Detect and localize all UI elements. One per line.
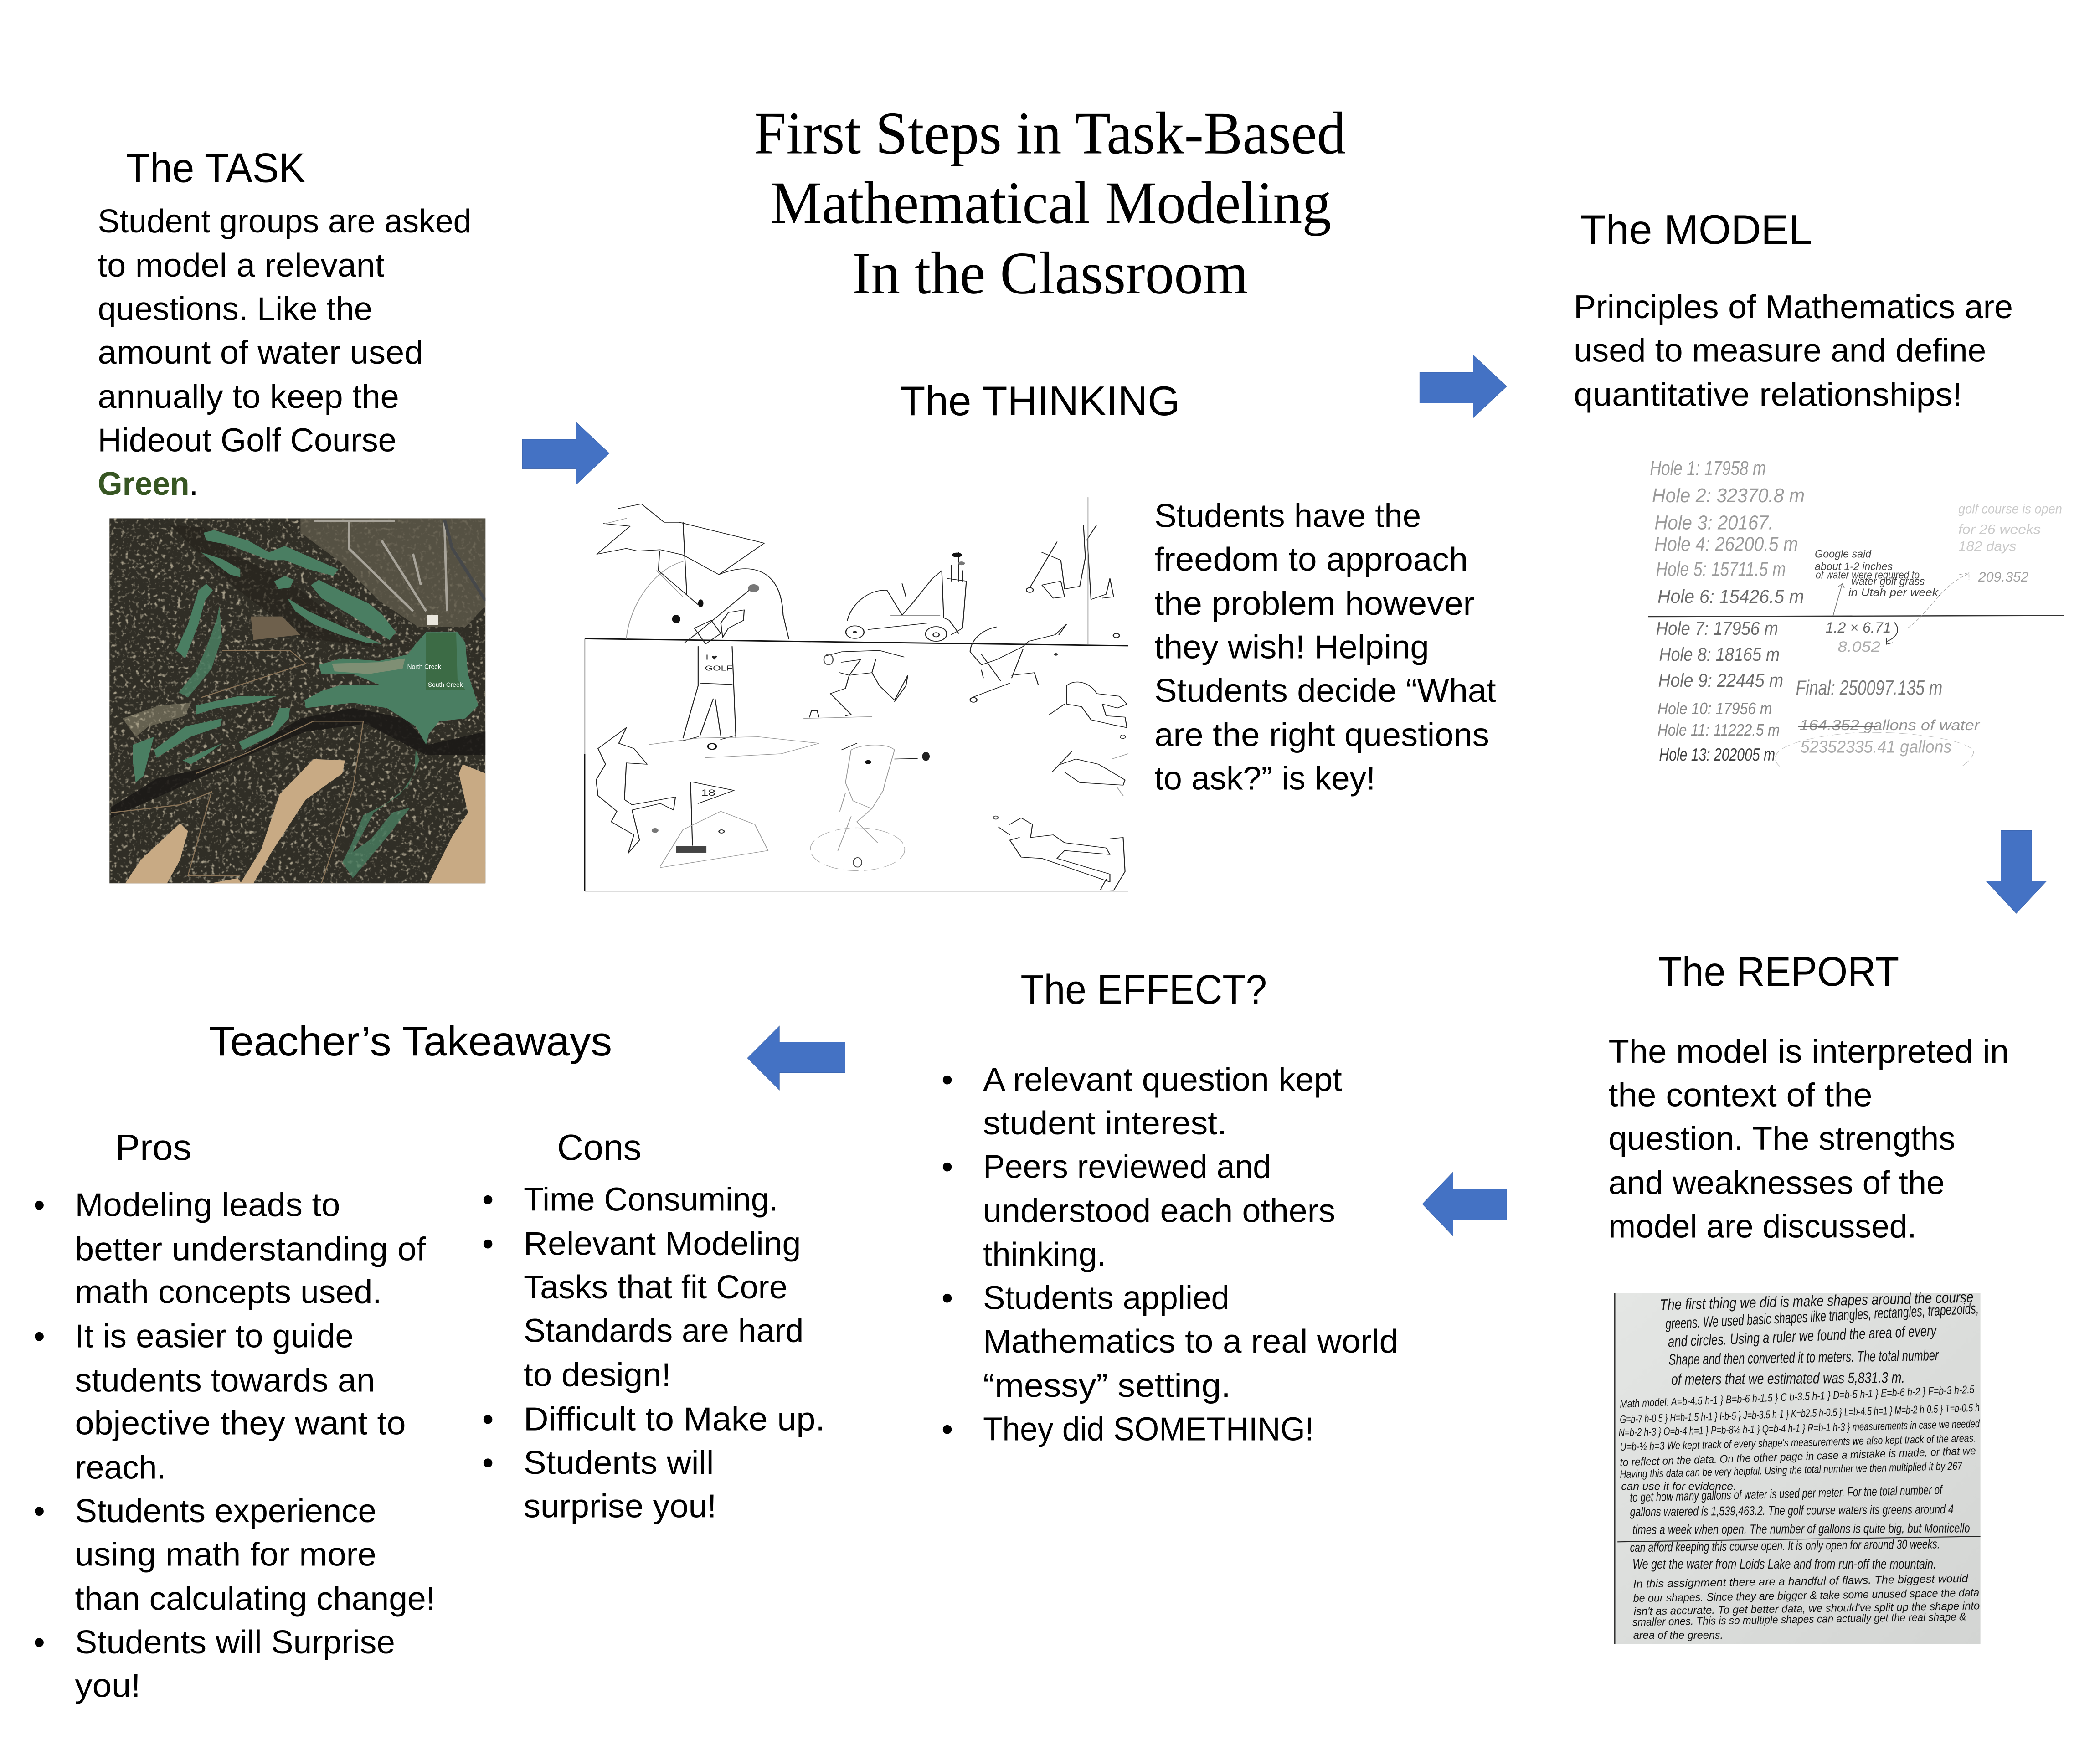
aerial photo of golf course (109, 518, 485, 883)
handwritten report photo: to reflect on the data. On the other page in case a mistake is made, or that we (1620, 1445, 1976, 1469)
handwritten measurement notes: 52352335.41 gallons (1801, 737, 1951, 757)
list: effect bullets (942, 1062, 1398, 1448)
handwritten measurement notes: 1.2 × 6.71 (1826, 619, 1891, 636)
handwritten report photo: to get how many gallons of water is used per meter. For the total number of (1630, 1483, 1943, 1505)
list: cons: Students will (524, 1445, 714, 1481)
handwritten report photo: be our shapes. Since they are bigger & take some unused space the data (1633, 1587, 1979, 1605)
handwritten measurement notes: for 26 weeks (1958, 521, 2041, 537)
handwritten measurement notes: Hole 9: 22445 m (1658, 669, 1783, 691)
panel: the report (1608, 949, 2009, 1245)
list: pros: students towards an (75, 1362, 375, 1399)
list: pros: • (33, 1493, 45, 1529)
text block: report description: the context of the (1608, 1077, 1872, 1113)
text block: task description: annually to keep the (98, 379, 399, 415)
list: effect bullets: student interest. (983, 1105, 1227, 1142)
handwritten report photo: area of the greens. (1633, 1630, 1723, 1642)
text block: thinking description: they wish! Helping (1154, 629, 1429, 665)
text block: thinking description: Students have the (1154, 498, 1421, 534)
text block: model description: Principles of Mathematics are (1574, 289, 2013, 325)
list: pros: using math for more (75, 1536, 376, 1573)
handwritten report photo: U=b-½ h=3 We kept track of every shape's measurements we also kept track of the areas. (1620, 1432, 1976, 1453)
list: pros: Students will Surprise (75, 1624, 395, 1661)
aerial photo of golf course: North Creek (407, 663, 441, 670)
heading: the thinking: The THINKING (900, 378, 1180, 424)
text block: model description: used to measure and define (1574, 332, 1986, 369)
list: cons: Difficult to Make up. (524, 1401, 825, 1438)
text block: model description: quantitative relationships! (1574, 376, 1962, 413)
text block: task description (98, 203, 471, 502)
handwritten measurement notes: in Utah per week. (1848, 587, 1941, 599)
list: pros: Students experience (75, 1493, 376, 1529)
title (754, 99, 1346, 307)
list: cons: • (482, 1226, 494, 1262)
heading: the task: The TASK (126, 145, 305, 191)
handwritten report photo: isn't as accurate. To get better data, we should've split up the shape into (1633, 1600, 1980, 1618)
list: pros: better understanding of (75, 1231, 427, 1267)
handwritten measurement notes: Hole 1: 17958 m (1650, 457, 1766, 479)
heading: the report: The REPORT (1658, 949, 1899, 995)
handwritten report photo: In this assignment there are a handful of flaws. The biggest would (1633, 1573, 1969, 1590)
handwritten measurement notes: Hole 6: 15426.5 m (1657, 586, 1804, 607)
text block: thinking description: freedom to approach (1154, 541, 1468, 578)
handwritten report photo: can afford keeping this course open. It is only open for around 30 weeks. (1630, 1537, 1940, 1555)
text block: task description: questions. Like the (98, 291, 372, 327)
list: effect bullets: They did SOMETHING! (983, 1411, 1314, 1448)
handwritten report photo: of meters that we estimated was 5,831.3 m. (1671, 1369, 1905, 1388)
title: First Steps in Task-Based (754, 99, 1346, 166)
list: pros: you! (75, 1668, 141, 1704)
handwritten measurement notes: Hole 3: 20167. (1654, 512, 1774, 534)
list: effect bullets: A relevant question kept (983, 1062, 1342, 1098)
student sketch of golfers: I ♥ (705, 654, 717, 661)
arrow: task to thinking (522, 422, 609, 485)
heading: the effect: The EFFECT? (1020, 967, 1267, 1013)
handwritten measurement notes: Final: 250097.135 m (1796, 676, 1942, 700)
text block: thinking description (1154, 498, 1496, 797)
list: cons: • (482, 1445, 494, 1481)
handwritten report photo: and circles. Using a ruler we found the area of every (1668, 1323, 1937, 1350)
panel: teacher's takeaways (33, 1019, 825, 1704)
handwritten report photo: We get the water from Loids Lake and from run-off the mountain. (1632, 1556, 1936, 1572)
list: effect bullets: understood each others (983, 1193, 1335, 1230)
arrow: effect to takeaways (747, 1026, 845, 1090)
list: cons: surprise you! (524, 1488, 716, 1525)
subheading: cons: Cons (557, 1127, 642, 1168)
handwritten report photo: The first thing we did is make shapes around the course (1660, 1289, 1974, 1313)
list: effect bullets: • (942, 1280, 953, 1317)
list: cons: Relevant Modeling (524, 1226, 801, 1262)
handwritten measurement notes: Hole 2: 32370.8 m (1652, 484, 1805, 507)
handwritten measurement notes: Hole 8: 18165 m (1659, 643, 1780, 665)
list: pros: Modeling leads to (75, 1187, 340, 1223)
list: pros: than calculating change! (75, 1580, 435, 1617)
list: pros: • (33, 1318, 45, 1354)
handwritten measurement notes: Hole 13: 202005 m (1659, 745, 1775, 764)
text block: thinking description: the problem however (1154, 586, 1475, 622)
handwritten measurement notes: about 1-2 inches (1815, 561, 1893, 573)
handwritten measurement notes: 209.352 (1978, 569, 2028, 585)
handwritten report photo: can use it for evidence. (1621, 1481, 1736, 1493)
handwritten measurement notes: 8.052 (1838, 638, 1881, 655)
text block: report description: model are discussed. (1608, 1208, 1916, 1245)
handwritten report photo: Shape and then converted it to meters. The total number (1668, 1347, 1939, 1369)
text block: thinking description: are the right questions (1154, 717, 1489, 753)
list: effect bullets: • (942, 1411, 953, 1448)
student sketch of golfers (585, 497, 1128, 891)
handwritten measurement notes: 164.352 gallons of water (1800, 717, 1981, 733)
handwritten report photo: times a week when open. The number of gallons is quite big, but Monticello (1632, 1521, 1970, 1537)
handwritten measurement notes: Hole 5: 15711.5 m (1656, 558, 1786, 581)
subheading: pros: Pros (115, 1127, 191, 1168)
list: effect bullets: • (942, 1149, 953, 1185)
handwritten measurement notes (1648, 457, 2064, 767)
text block: report description: The model is interpreted in (1608, 1034, 2009, 1070)
list: pros: math concepts used. (75, 1274, 382, 1310)
heading: the model: The MODEL (1580, 207, 1812, 253)
arrow: thinking to model (1420, 355, 1507, 418)
text block: task description: to model a relevant (98, 247, 384, 284)
handwritten measurement notes: Hole 11: 11222.5 m (1657, 721, 1780, 740)
handwritten report photo: gallons watered is 1,539,463.2. The golf course waters its greens around 4 (1630, 1503, 1954, 1519)
list: effect bullets: thinking. (983, 1236, 1106, 1273)
text block: task description: amount of water used (98, 335, 423, 371)
title: In the Classroom (852, 240, 1248, 307)
list: pros: • (33, 1624, 45, 1661)
text block: task description: Student groups are asked (98, 203, 471, 240)
handwritten measurement notes: Hole 4: 26200.5 m (1654, 533, 1798, 556)
text block: report description: question. The strengths (1608, 1121, 1956, 1157)
list: effect bullets: “messy” setting. (983, 1368, 1231, 1404)
list: cons: Standards are hard (524, 1313, 803, 1349)
handwritten measurement notes: Hole 10: 17956 m (1657, 700, 1772, 718)
handwritten measurement notes: water golf grass (1852, 575, 1925, 587)
handwritten report photo: smaller ones. This is so multiple shapes can actually get the real shape & (1632, 1611, 1966, 1628)
list: effect bullets: Peers reviewed and (983, 1149, 1271, 1185)
student sketch of golfers: 18 (701, 788, 715, 798)
text block: report description (1608, 1034, 2009, 1245)
handwritten report photo: Math model: A=b-4.5 h-1 } B=b-6 h-1.5 } C b-3.5 h-1 } D=b-5 h-1 } E=b-6 h-2 } F=b-3 h-2.5 (1620, 1384, 1975, 1410)
panel: the thinking (900, 378, 1496, 797)
handwritten measurement notes: Hole 7: 17956 m (1656, 618, 1778, 639)
heading: teacher's takeaways: Teacher’s Takeaways (209, 1019, 612, 1065)
list: cons: • (482, 1401, 494, 1438)
handwritten report photo: Having this data can be very helpful. Using the total number we then multiplied it by 267 (1620, 1460, 1963, 1481)
list: pros: It is easier to guide (75, 1318, 354, 1354)
list: pros (33, 1187, 435, 1704)
text block: thinking description: Students decide “What (1154, 673, 1496, 709)
title: Mathematical Modeling (770, 169, 1331, 236)
student sketch of golfers: GOLF (705, 665, 733, 672)
panel: the model (1574, 207, 2013, 413)
list: cons: Tasks that fit Core (524, 1269, 788, 1306)
list: pros: objective they want to (75, 1405, 406, 1441)
panel: the effect (942, 967, 1398, 1448)
list: cons (482, 1182, 825, 1525)
text block: task description: Hideout Golf Course (98, 422, 396, 458)
handwritten measurement notes: 182 days (1958, 539, 2016, 554)
text block: task description: Green. (98, 466, 198, 502)
text block: thinking description: to ask?” is key! (1154, 760, 1375, 797)
list: cons: • (482, 1182, 494, 1218)
text block: model description (1574, 289, 2013, 413)
list: effect bullets: Mathematics to a real world (983, 1323, 1398, 1360)
arrow: model to report (1986, 830, 2046, 913)
list: effect bullets: • (942, 1062, 953, 1098)
panel: the task (98, 145, 471, 502)
list: effect bullets: Students applied (983, 1280, 1230, 1317)
list: cons: Time Consuming. (524, 1182, 778, 1218)
list: cons: to design! (524, 1357, 671, 1394)
aerial photo of golf course: South Creek (428, 681, 463, 688)
list: pros: reach. (75, 1449, 166, 1486)
handwritten measurement notes: of water were required to (1816, 569, 1920, 581)
handwritten report photo (1614, 1289, 1981, 1644)
text block: report description: and weaknesses of the (1608, 1165, 1945, 1201)
arrow: report to effect (1422, 1172, 1507, 1236)
list: pros: • (33, 1187, 45, 1223)
handwritten measurement notes: Google said (1815, 548, 1872, 561)
